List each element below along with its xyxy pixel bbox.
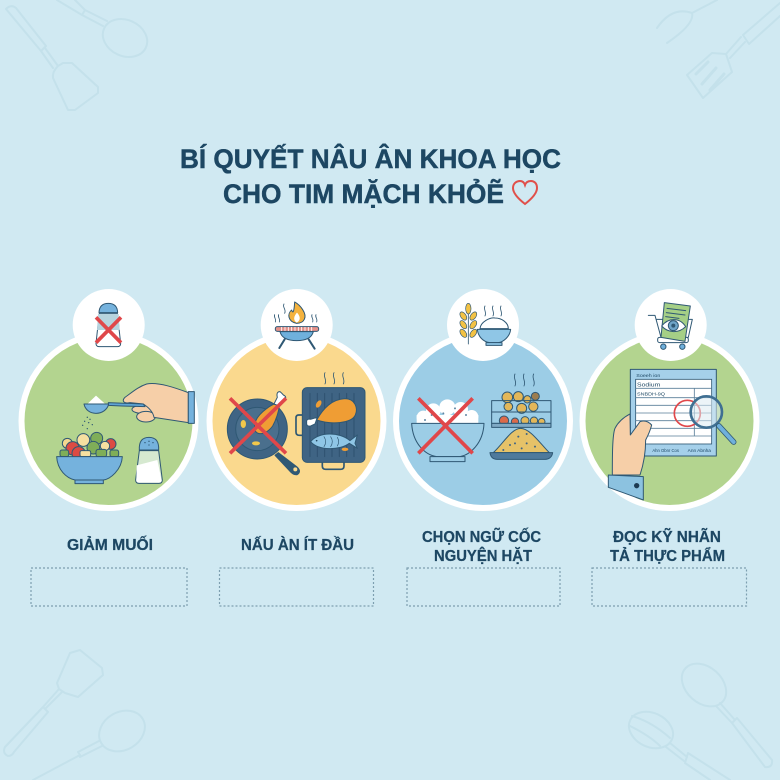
- label: đọc kỹ nhãn thực phẩm: [610, 528, 725, 565]
- icon: hand with spoon: [84, 384, 194, 423]
- icon: frying pan with chicken crossed out: [227, 392, 300, 475]
- icon: nutrition label: Ann Abnha: [688, 448, 712, 453]
- icon: barbecue grill: [274, 302, 319, 349]
- icon: nutrition label: Soeeh ion: [636, 373, 661, 379]
- decorative utensils: top right: [657, 0, 780, 98]
- title: [180, 144, 561, 209]
- label: đọc kỹ nhãn thực phẩm: TẢ THỰC PHẨM: [610, 547, 725, 565]
- panel: chọn ngũ cốc nguyên hạt: [396, 289, 570, 508]
- icon: nutrition label: Sodium: [637, 383, 661, 389]
- panel: giảm muối: [22, 289, 196, 508]
- icon: heart: [513, 181, 537, 204]
- empty text box 4: [592, 568, 746, 606]
- icon: magnifying glass: [691, 396, 734, 442]
- empty text box 2: [220, 568, 374, 606]
- label: giảm muối: GIẢM MUỐI: [67, 536, 153, 554]
- decorative utensils: top left: [6, 0, 153, 110]
- title: CHO TIM MẶCH KHỎẼ: [223, 179, 504, 209]
- label: nấu ăn ít dầu: NẤU ÀN ÍT ĐẦU: [241, 537, 354, 554]
- icon: salt shaker: [136, 437, 162, 483]
- icon: whole grain dishes: [490, 374, 553, 459]
- label: chọn ngũ cốc nguyên hạt: CHỌN NGỮ CỐC: [422, 528, 541, 546]
- icon: nutrition label: SNBDH-9Q: [637, 391, 665, 397]
- label: chọn ngũ cốc nguyên hạt: [422, 528, 541, 565]
- icon: wheat and rice bowl: [458, 303, 511, 345]
- icon: salad bowl: [57, 432, 122, 484]
- panel: đọc kỹ nhãn thực phẩm: [582, 289, 756, 508]
- label: chọn ngũ cốc nguyên hạt: NGUYỆN HẶT: [434, 547, 533, 565]
- panel: nấu ăn ít dầu: [210, 289, 384, 508]
- empty text box 3: [407, 568, 560, 606]
- icon: salt shaker crossed out: [96, 303, 121, 347]
- title: BÍ QUYẾT NÂU ÂN KHOA HỌC: [180, 144, 561, 174]
- empty text box 1: [31, 568, 187, 606]
- icon: nutrition label: [630, 369, 716, 456]
- icon: nutrition label: Ahn Obnr Cos: [652, 448, 679, 453]
- icon: white rice bowl crossed out: [412, 398, 484, 462]
- falling salt: [82, 417, 93, 429]
- label: đọc kỹ nhãn thực phẩm: ĐỌC KỸ NHÃN: [613, 528, 721, 546]
- icon: hand holding label: [608, 414, 652, 500]
- decorative utensils: bottom right: [623, 655, 772, 780]
- icon: grill pan with chicken and fish: [296, 373, 365, 469]
- decorative utensils: bottom left: [4, 650, 152, 780]
- icon: shopping cart with label and eye: [648, 303, 692, 349]
